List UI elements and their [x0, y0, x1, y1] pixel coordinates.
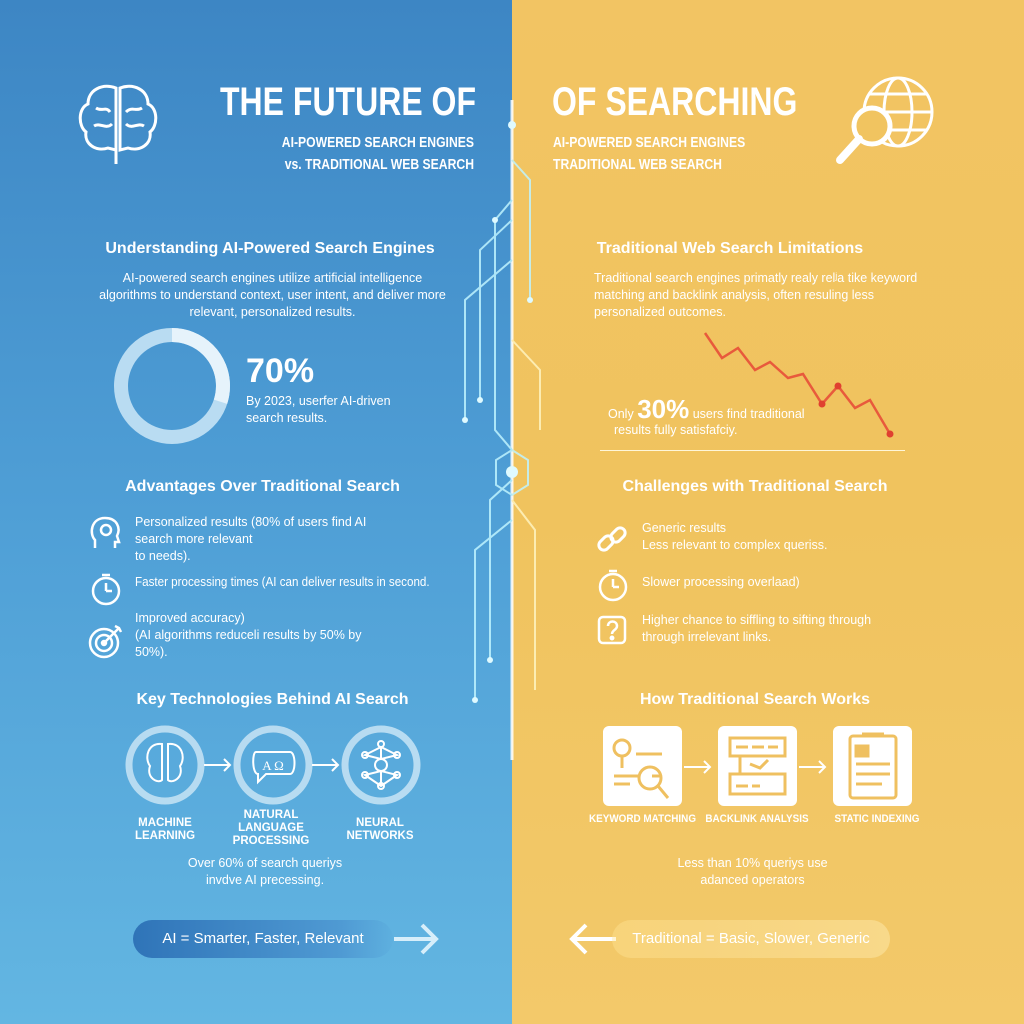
stat 30%: [608, 394, 805, 437]
text: Slower processing overlaad): [642, 575, 800, 589]
text: MACHINE: [138, 817, 192, 829]
text: NETWORKS: [346, 830, 414, 842]
icon: stopwatch: [598, 570, 628, 602]
process labels: [589, 813, 919, 825]
line chart declining: [704, 332, 894, 438]
heading: challenges: Challenges with Traditional Search: [623, 478, 887, 495]
center glowing circuit line: [462, 100, 541, 760]
heading: advantages: Advantages Over Traditional Search: [125, 478, 400, 495]
stat 30%: results fully satisfafciy.: [614, 423, 737, 437]
text: NATURAL: [244, 809, 298, 821]
subtitle left: vs. TRADITIONAL WEB SEARCH: [285, 157, 474, 173]
icon: chain link: [597, 526, 627, 552]
text: STATIC INDEXING: [835, 813, 919, 825]
tech flow diagram: A Ω: [262, 758, 284, 773]
subtitle right: [553, 135, 745, 173]
text: through irrelevant links.: [642, 630, 771, 644]
icon: question box: [598, 616, 626, 644]
text: LANGUAGE: [238, 822, 304, 834]
arrow left: [569, 924, 616, 954]
pill: AI summary: [133, 920, 393, 958]
text: NEURAL: [356, 817, 404, 829]
heading: limitations: Traditional Web Search Limitations: [597, 240, 863, 257]
text: Personalized results (80% of users find AI search more relevant: [135, 515, 366, 546]
challenges list: [597, 521, 871, 644]
text: to needs).: [135, 549, 191, 563]
arrow right: [394, 924, 439, 954]
text: limitations: Traditional search engines primatly realy relʲa tike keyword matching and backlink analysis, often resuling less personalized outcomes.: [594, 271, 917, 319]
heading: understanding AI: Understanding AI-Powered Search Engines: [105, 240, 435, 257]
icon: target: [88, 624, 122, 658]
text: Improved accuracy): [135, 611, 245, 625]
heading: key technologies: Key Technologies Behind AI Search: [136, 691, 409, 708]
icon: stopwatch: [92, 574, 120, 606]
title right: OF SEARCHING: [552, 80, 797, 124]
tech flow diagram: [126, 726, 420, 804]
text: 50%).: [135, 645, 168, 659]
subtitle left: [282, 135, 474, 173]
text: over 60%: invdve AI precessing.: [206, 873, 324, 887]
text: (AI algorithms reduceli results by 50% by: [135, 628, 361, 642]
stat 70%: [246, 352, 391, 425]
stat 70%: By 2023, userfer AI-driven: [246, 394, 391, 408]
text: Generic results: [642, 521, 726, 535]
advantages list: [88, 515, 430, 659]
text: less than 10%: [677, 856, 828, 887]
title left: THE FUTURE OF: [220, 80, 476, 124]
text: less than 10%: Less than 10% queriys use: [677, 856, 828, 870]
icon: globe with magnifier: [836, 76, 934, 164]
text: Faster processing times (AI can deliver results in second.: [135, 575, 430, 589]
process boxes: [603, 726, 912, 806]
stat 70%: search results.: [246, 411, 327, 425]
text: Less relevant to complex queriss.: [642, 538, 828, 552]
text: less than 10%: adanced operators: [700, 873, 805, 887]
subtitle left: AI-POWERED SEARCH ENGINES: [282, 135, 474, 151]
stat 70%: 70%: [246, 352, 314, 390]
text: BACKLINK ANALYSIS: [705, 813, 809, 825]
pill: traditional summary: [612, 920, 890, 958]
icon: brain: [78, 84, 158, 164]
pill: AI summary: AI = Smarter, Faster, Relevant: [162, 930, 364, 947]
subtitle right: TRADITIONAL WEB SEARCH: [553, 157, 722, 173]
stat 30%: Only 30% users find traditional: [608, 394, 805, 424]
icon: head gear: [90, 516, 121, 548]
text: over 60%: [188, 856, 342, 887]
text: AI description: AI-powered search engines utilize artificial intelligence algorithms to understand context, user intent, and deliver more relevant, personalized results.: [99, 271, 446, 319]
donut chart 70%: [114, 328, 230, 444]
text: PROCESSING: [233, 835, 309, 847]
text: LEARNING: [135, 830, 195, 842]
heading: how traditional works: How Traditional Search Works: [640, 691, 870, 708]
text: Higher chance to siffling to sifting through: [642, 613, 871, 627]
text: KEYWORD MATCHING: [589, 813, 696, 825]
text: over 60%: Over 60% of search queriys: [188, 856, 342, 870]
subtitle right: AI-POWERED SEARCH ENGINES: [553, 135, 745, 151]
pill: traditional summary: Traditional = Basic, Slower, Generic: [632, 930, 870, 947]
tech labels: [135, 809, 414, 847]
